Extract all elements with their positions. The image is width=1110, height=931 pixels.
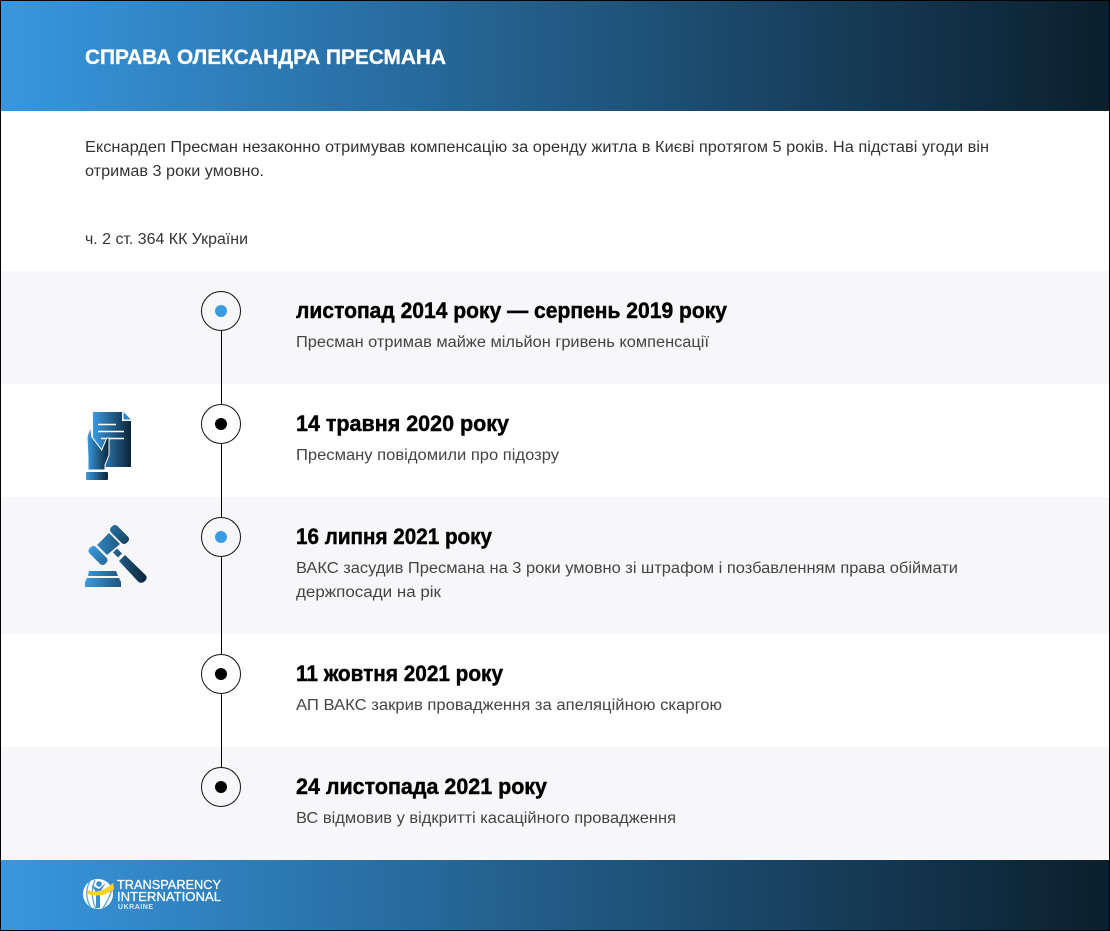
timeline event 4 <box>202 654 722 714</box>
timeline event 1 <box>202 292 727 351</box>
timeline event 5: ВС відмовив у відкритті касаційного провадження <box>296 810 676 827</box>
timeline event 2: 14 травня 2020 року <box>296 411 509 436</box>
timeline event 3: 16 липня 2021 року <box>296 524 492 549</box>
timeline event 5 <box>202 768 676 827</box>
timeline event 5: 24 листопада 2021 року <box>296 774 547 799</box>
timeline event 2 <box>202 404 559 464</box>
title: СПРАВА ОЛЕКСАНДРА ПРЕСМАНА <box>85 45 446 69</box>
timeline event 3 <box>202 518 958 601</box>
intro text <box>85 139 989 180</box>
timeline event 2: Пресману повідомили про підозру <box>296 447 559 464</box>
timeline event 4: АП ВАКС закрив провадження за апеляційною скаргою <box>296 697 722 714</box>
intro text: отримав 3 роки умовно. <box>85 163 264 180</box>
intro text: Екснардеп Пресман незаконно отримував компенсацію за оренду житла в Києві протягом 5 років. На підставі угоди він <box>85 139 989 156</box>
Transparency International Ukraine logo: TRANSPARENCY <box>117 877 221 892</box>
timeline line <box>220 311 222 787</box>
Transparency International Ukraine logo: INTERNATIONAL <box>117 889 221 904</box>
timeline event 4: 11 жовтня 2021 року <box>296 661 503 686</box>
legal article reference: ч. 2 ст. 364 КК України <box>85 231 248 248</box>
icon: gavel <box>85 524 147 587</box>
timeline event 1: листопад 2014 року — серпень 2019 року <box>296 298 727 323</box>
footer band <box>1 860 1109 930</box>
timeline event 1: Пресман отримав майже мільйон гривень компенсації <box>296 334 710 351</box>
header band <box>1 1 1109 111</box>
row backgrounds <box>1 271 1109 860</box>
timeline event 3: ВАКС засудив Пресмана на 3 роки умовно зі штрафом і позбавленням права обіймати <box>296 560 958 577</box>
timeline event 3: держпосади на рік <box>296 584 441 601</box>
Transparency International Ukraine logo <box>83 877 221 911</box>
icon: hand holding document <box>86 412 131 480</box>
Transparency International Ukraine logo: UKRAINE <box>118 904 153 911</box>
